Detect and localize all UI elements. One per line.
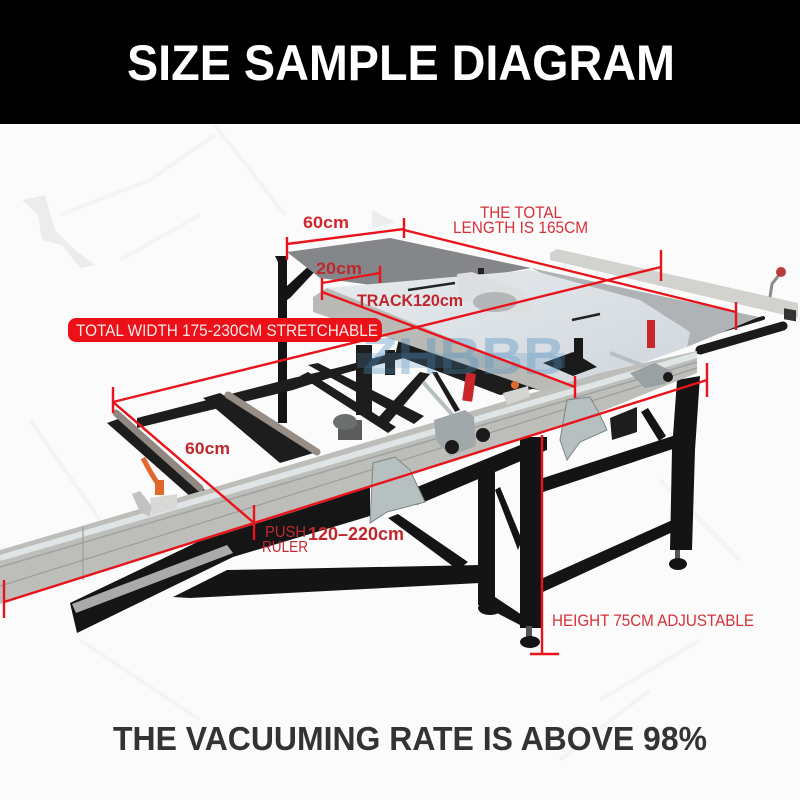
- label: total length: [453, 204, 588, 237]
- silver plates: [370, 397, 607, 523]
- label: height: HEIGHT 75CM ADJUSTABLE: [552, 611, 754, 630]
- label: push ruler: PUSH: [265, 524, 306, 541]
- dimension lines: [4, 218, 736, 654]
- watermark: ZHBBB: [362, 328, 565, 386]
- label: push ruler: [262, 524, 308, 556]
- bearing wheel: [333, 414, 362, 440]
- blade guard: [457, 268, 535, 315]
- label: push ruler: RULER: [262, 539, 308, 556]
- left stop with orange handle: [132, 458, 177, 517]
- header band: [0, 0, 800, 124]
- saw table machine: [0, 238, 798, 648]
- rollers: [116, 395, 317, 488]
- table front edge: [313, 288, 572, 400]
- label: total width pill: TOTAL WIDTH 175-230CM STRETCHABLE: [76, 321, 378, 340]
- label: track 120cm: TRACK120cm: [357, 292, 463, 310]
- right black rails: [680, 318, 783, 350]
- label: total length: THE TOTAL: [480, 204, 562, 222]
- extension frame: [107, 343, 433, 498]
- label: push range: 120–220cm: [308, 524, 404, 544]
- bottom caption: THE VACUUMING RATE IS ABOVE 98%: [113, 720, 707, 757]
- label: total length: LENGTH IS 165CM: [453, 219, 588, 237]
- main sliding beam: [0, 351, 697, 604]
- rip fence: [550, 249, 798, 321]
- dark table top: [287, 238, 531, 290]
- label: 60cm lower: 60cm: [185, 439, 230, 458]
- legs and braces: [173, 376, 700, 648]
- table slots: [408, 283, 600, 320]
- label: 20cm: 20cm: [316, 259, 362, 278]
- back left leg and bracket: [275, 256, 320, 423]
- orange stop block: [503, 381, 530, 405]
- black knob post: [543, 338, 597, 376]
- light centre table: [327, 270, 690, 393]
- central supports: [356, 335, 555, 424]
- toggle clamps with red handles: [423, 320, 673, 456]
- label: 60cm top: 60cm: [303, 213, 349, 232]
- lower sliding rail: [70, 478, 370, 633]
- title: SIZE SAMPLE DIAGRAM: [127, 35, 675, 91]
- motor box: [610, 407, 637, 440]
